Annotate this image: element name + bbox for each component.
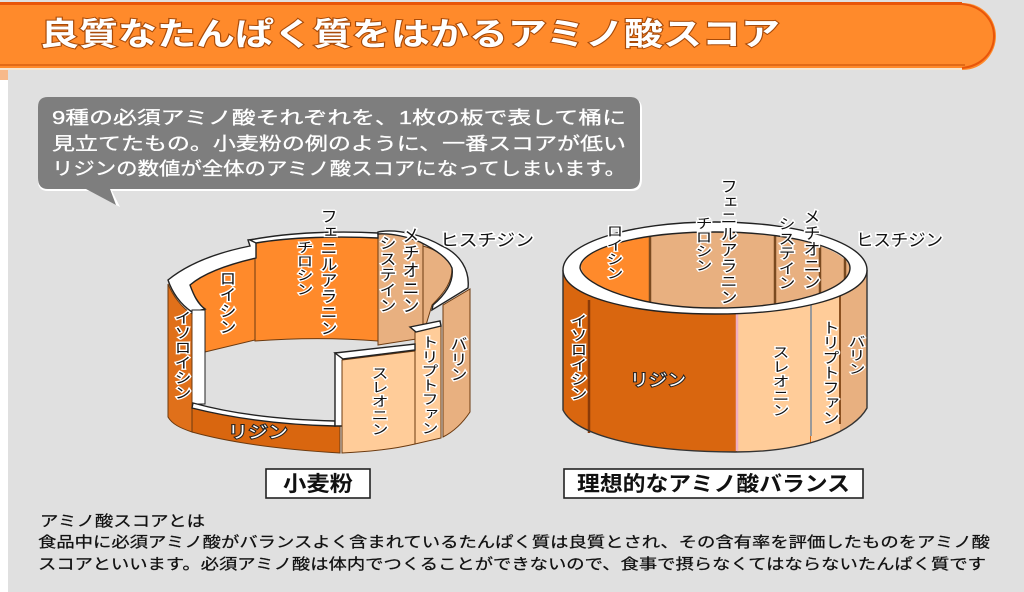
rim: threonine top	[335, 344, 415, 359]
labels: ideal balance barrel	[568, 178, 943, 425]
barrel inner back	[580, 232, 850, 308]
labels: ideal balance barrel: トリプトファン	[820, 320, 838, 425]
caption: ideal amino acid balance: 理想的なアミノ酸バランス	[577, 473, 850, 496]
labels: wheat flour barrel: トリプトファン	[418, 335, 438, 435]
stave: tryptophan	[415, 325, 441, 444]
labels: wheat flour barrel: メチオニン	[400, 226, 418, 314]
labels: ideal balance barrel: リジン	[630, 371, 686, 390]
title banner: 良質なたんぱく質をはかるアミノ酸スコア	[40, 16, 780, 52]
callout bubble: 見立てたもの。小麦粉の例のように、一番スコアが低い	[52, 134, 626, 154]
stave: valine	[443, 289, 470, 437]
rim: lysine top	[192, 403, 335, 426]
stave: lysine	[192, 408, 340, 453]
stave: threonine	[342, 351, 415, 453]
rim: right end	[378, 231, 468, 310]
labels: wheat flour barrel	[172, 208, 534, 442]
inner slab: left end	[192, 310, 205, 404]
labels: wheat flour barrel: フェニルアラニン	[318, 208, 336, 336]
outer outline	[563, 270, 867, 452]
barrel outer wall	[563, 270, 867, 452]
caption: wheat flour	[266, 469, 370, 498]
labels: ideal balance barrel: ロイシン	[604, 224, 622, 280]
stave: phenylalanine and tyrosine	[255, 237, 378, 341]
caption: ideal amino acid balance	[564, 469, 863, 498]
caption: wheat flour: 小麦粉	[283, 473, 353, 496]
callout bubble: リジンの数値が全体のアミノ酸スコアになってしまいます。	[52, 159, 626, 179]
chart: ideal balance barrel	[563, 222, 867, 460]
labels: wheat flour barrel: ロイシン	[216, 270, 236, 335]
inner slab: threonine end	[335, 353, 343, 426]
explanatory text: アミノ酸スコアとは	[40, 513, 205, 530]
labels: ideal balance barrel: チロシン	[692, 216, 712, 272]
labels: wheat flour barrel: イソロイシン	[172, 310, 190, 400]
explanatory text	[38, 513, 990, 573]
stave: valine	[840, 276, 866, 431]
stave: isoleucine	[168, 284, 192, 432]
labels: ideal balance barrel: バリン	[846, 335, 864, 375]
labels: wheat flour barrel: リジン	[228, 423, 288, 442]
labels: ideal balance barrel: フェニルアラニン	[718, 178, 736, 305]
chart: wheat flour barrel	[168, 231, 470, 453]
callout bubble: 9種の必須アミノ酸それぞれを、1枚の板で表して桶に	[52, 108, 626, 128]
stave dividers	[588, 300, 590, 433]
stave: methionine and cysteine	[378, 232, 423, 345]
labels: ideal balance barrel: メチオニン	[800, 208, 820, 290]
labels: ideal balance barrel: イソロイシン	[568, 313, 586, 401]
labels: wheat flour barrel: バリン	[448, 336, 466, 382]
stave: histidine	[423, 246, 452, 335]
labels: ideal balance barrel: システイン	[776, 216, 794, 290]
rim: rear left	[168, 239, 256, 312]
stave: leucine	[186, 258, 255, 352]
stave: inner leucine	[581, 232, 650, 305]
rim	[563, 222, 867, 314]
labels: wheat flour barrel: チロシン	[294, 240, 312, 296]
inner stave dividers	[650, 232, 845, 305]
stave: tryptophan	[811, 297, 840, 442]
rim: rear centre	[250, 232, 378, 243]
labels: wheat flour barrel: ヒスチジン	[440, 231, 534, 250]
labels: ideal balance barrel: ヒスチジン	[856, 231, 943, 250]
callout bubble	[38, 97, 642, 207]
labels: wheat flour barrel: スレオニン	[368, 366, 388, 436]
labels: ideal balance barrel: スレオニン	[770, 345, 788, 417]
title banner	[0, 3, 996, 70]
explanatory text: 食品中に必須アミノ酸がバランスよく含まれているたんぱく質は良質とされ、その含有率を評価したものをアミノ酸	[38, 533, 990, 551]
stave: threonine	[737, 306, 810, 452]
rim: tryptophan top	[410, 321, 441, 332]
explanatory text: スコアといいます。必須アミノ酸は体内でつくることができないので、食事で摂らなくてはならないたんぱく質です	[38, 555, 986, 573]
labels: wheat flour barrel: システイン	[376, 235, 396, 313]
